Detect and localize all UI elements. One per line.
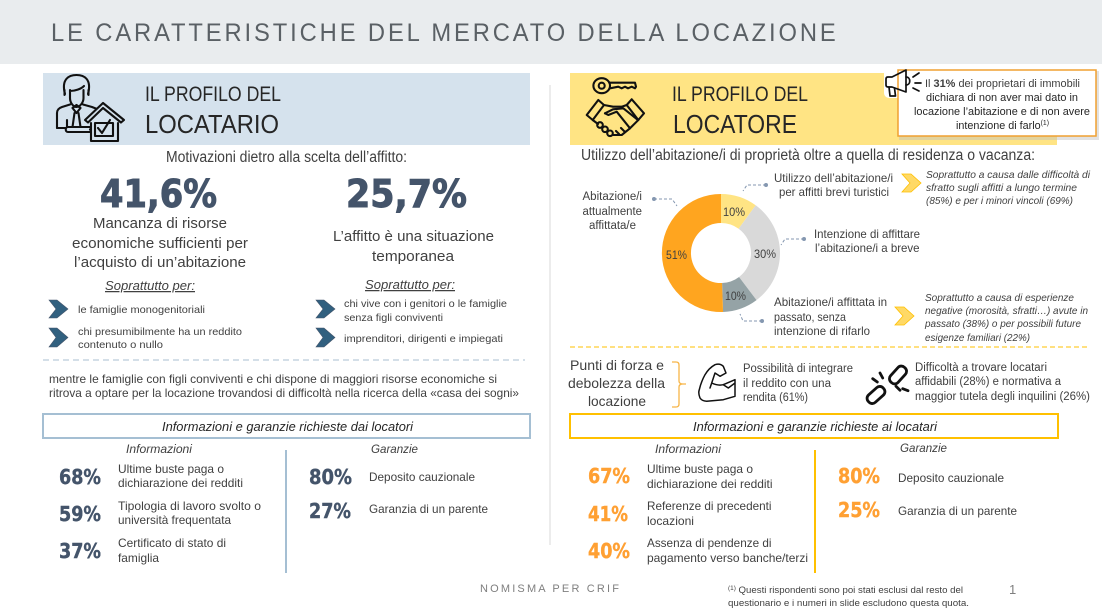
- heading: punti di forza e debolezza: Punti di forza e: [570, 357, 664, 373]
- note: difficoltà di sfratto: sfratto sugli affitti a lungo termine: [926, 182, 1077, 194]
- list: informazioni richieste dai locatori: Ultime buste paga o: [118, 462, 224, 476]
- note: esperienze negative: [895, 292, 1088, 344]
- list: garanzie richieste dai locatori: [309, 442, 488, 523]
- heading: il profilo del locatario: IL PROFILO DEL: [145, 83, 281, 106]
- list: informazioni richieste ai locatari: 67%: [588, 464, 630, 488]
- list: informazioni richieste dai locatori: Informazioni: [126, 442, 192, 456]
- heading: punti di forza e debolezza: [568, 357, 686, 409]
- list: soprattutto per, colonna destra: [316, 278, 507, 347]
- list: soprattutto per, colonna sinistra: [49, 279, 242, 351]
- stat: 25,7%: [333, 172, 494, 265]
- footnote: (1): [728, 586, 736, 592]
- list: informazioni richieste ai locatari: [588, 442, 808, 565]
- text: punto di debolezza: [915, 362, 1090, 403]
- note: difficoltà di sfratto: [902, 169, 1091, 207]
- heading: il profilo del locatario: [145, 83, 281, 139]
- list: soprattutto per, colonna sinistra: Soprattutto per:: [105, 279, 195, 293]
- list: informazioni richieste dai locatori: 59%: [59, 502, 101, 526]
- donut chart: 10%: [725, 289, 746, 303]
- list: garanzie richieste ai locatari: 80%: [838, 464, 880, 488]
- list: informazioni richieste ai locatari: dichiarazione dei redditi: [647, 477, 772, 491]
- heading: il profilo del locatore: LOCATORE: [673, 109, 797, 139]
- note: esperienze negative: passato (38%) o per possibili future: [924, 318, 1081, 330]
- list: garanzie richieste ai locatari: Deposito cauzionale: [898, 471, 1004, 485]
- list: informazioni richieste ai locatari: pagamento verso banche/terzi: [647, 551, 808, 565]
- box: informazioni e garanzie ai locatari: Informazioni e garanzie richieste ai locatari: [693, 419, 938, 434]
- title band: [0, 0, 1102, 64]
- list: soprattutto per, colonna destra: senza figli conviventi: [344, 312, 443, 324]
- label: affitti brevi turistici: [743, 171, 893, 199]
- list: soprattutto per, colonna sinistra: chi presumibilmente ha un reddito: [78, 326, 242, 338]
- list: soprattutto per, colonna destra: imprenditori, dirigenti e impiegati: [344, 333, 503, 345]
- icon: flexed arm: [699, 364, 735, 401]
- icon: tenant with house: [57, 75, 124, 141]
- list: soprattutto per, colonna destra: Soprattutto per:: [365, 278, 455, 292]
- text: punto di debolezza: Difficoltà a trovare locatari: [915, 362, 1047, 374]
- stat: 25,7%: 25,7%: [346, 172, 467, 216]
- list: garanzie richieste ai locatari: [838, 441, 1017, 522]
- list: garanzie richieste dai locatori: Garanzia di un parente: [369, 502, 488, 516]
- list: informazioni richieste dai locatori: Certificato di stato di: [118, 536, 226, 550]
- callout: 31% proprietari: intenzione di farlo: [956, 120, 1042, 132]
- donut chart: 10%: [723, 205, 745, 219]
- note: difficoltà di sfratto: (85%) e per i minori vincoli (69%): [926, 195, 1073, 207]
- list: soprattutto per, colonna sinistra: le famiglie monogenitoriali: [78, 304, 205, 316]
- footer: source: NOMISMA PER CRIF: [480, 583, 619, 595]
- title band: LE CARATTERISTICHE DEL MERCATO DELLA LOCAZIONE: [51, 19, 836, 47]
- list: garanzie richieste dai locatori: 27%: [309, 499, 351, 523]
- subheading: utilizzo dell'abitazione: Utilizzo dell’abitazione/i di proprietà oltre a quella di residenza o vacanza:: [581, 147, 1035, 164]
- list: informazioni richieste ai locatari: 41%: [588, 502, 628, 526]
- text block: famiglie con figli: [49, 372, 519, 400]
- list: informazioni richieste ai locatari: 40%: [588, 539, 630, 563]
- list: informazioni richieste dai locatori: dichiarazione dei redditi: [118, 476, 243, 490]
- note: esperienze negative: Soprattutto a causa di esperienze: [925, 292, 1074, 304]
- icon: megaphone: [886, 70, 921, 96]
- list: informazioni richieste dai locatori: [59, 442, 261, 565]
- heading: il profilo del locatore: [672, 83, 808, 139]
- label: attualmente affittata: Abitazione/i: [582, 191, 642, 203]
- box: informazioni e garanzie dai locatori: [43, 414, 530, 438]
- list: soprattutto per, colonna sinistra: contenuto o nullo: [78, 339, 163, 351]
- text: punto di debolezza: affidabili (28%) e normativa a: [915, 376, 1062, 388]
- footnote: [728, 585, 969, 608]
- label: intenzione di affittare a breve: Intenzione di affittare: [814, 227, 920, 241]
- panel: profilo del locatore: [568, 66, 1099, 573]
- list: garanzie richieste dai locatori: Garanzie: [371, 442, 418, 456]
- list: informazioni richieste dai locatori: 37%: [59, 539, 101, 563]
- box: informazioni e garanzie ai locatari: [570, 414, 1058, 438]
- list: garanzie richieste ai locatari: Garanzia di un parente: [898, 504, 1017, 518]
- text: punto di forza: Possibilità di integrare: [743, 363, 853, 375]
- stat: 25,7%: L’affitto è una situazione: [333, 228, 494, 245]
- text: punto di debolezza: maggior tutela degli inquilini (26%): [915, 391, 1090, 403]
- list: garanzie richieste ai locatari: 25%: [838, 498, 880, 522]
- text: punto di forza: [743, 363, 853, 404]
- label: affitti brevi turistici: per affitti brevi turistici: [779, 185, 889, 199]
- label: attualmente affittata: [582, 191, 677, 232]
- label: attualmente affittata: attualmente: [582, 206, 642, 218]
- stat: 41,6%: 41,6%: [100, 172, 217, 216]
- label: intenzione di affittare a breve: l’abitazione/i a breve: [815, 241, 920, 255]
- note: esperienze negative: esigenze familiari (22%): [925, 332, 1030, 344]
- list: soprattutto per, colonna destra: chi vive con i genitori o le famiglie: [344, 298, 507, 310]
- callout: 31% proprietari: dichiara di non aver mai dato in: [926, 92, 1078, 104]
- label: intenzione di affittare a breve: [781, 227, 920, 255]
- list: informazioni richieste ai locatari: locazioni: [647, 514, 694, 528]
- heading: punti di forza e debolezza: debolezza della: [568, 375, 665, 391]
- panel: profilo del locatario: [43, 73, 530, 573]
- label: attualmente affittata: affittata/e: [589, 220, 636, 232]
- list: informazioni richieste ai locatari: Informazioni: [655, 442, 721, 456]
- note: difficoltà di sfratto: Soprattutto a causa dalle difficoltà di: [926, 169, 1091, 181]
- stat: 41,6%: [72, 172, 248, 271]
- note: esperienze negative: negative (morosità, sfratti…) avute in: [925, 305, 1088, 317]
- label: affittata in passato: intenzione di rifarlo: [774, 324, 870, 338]
- list: garanzie richieste dai locatori: 80%: [309, 465, 352, 489]
- callout: 31% proprietari: Il 31% dei proprietari di immobili: [925, 78, 1080, 90]
- list: informazioni richieste ai locatari: Ultime buste paga o: [647, 462, 753, 476]
- label: affittata in passato: [740, 295, 887, 338]
- stat: 25,7%: temporanea: [372, 248, 455, 265]
- label: affittata in passato: Abitazione/i affittata in: [774, 295, 887, 309]
- text block: famiglie con figli: mentre le famiglie con figli conviventi e chi dispone di maggiori risorse economiche si: [49, 372, 497, 386]
- heading: il profilo del locatario: LOCATARIO: [145, 109, 279, 139]
- heading: il profilo del locatore: IL PROFILO DEL: [672, 83, 808, 106]
- text: punto di forza: il reddito con una: [743, 378, 832, 390]
- list: garanzie richieste ai locatari: Garanzie: [900, 441, 947, 455]
- label: affittata in passato: passato, senza: [774, 310, 846, 324]
- donut chart: [662, 194, 780, 312]
- callout: 31% proprietari: [884, 66, 1099, 140]
- text: punto di forza: rendita (61%): [743, 392, 808, 404]
- list: informazioni richieste dai locatori: famiglia: [118, 551, 159, 565]
- label: affitti brevi turistici: Utilizzo dell’abitazione/i: [774, 171, 893, 185]
- box: informazioni e garanzie dai locatori: Informazioni e garanzie richieste dai locatori: [162, 419, 414, 434]
- stat: 41,6%: economiche sufficienti per: [72, 235, 248, 252]
- donut chart: 51%: [666, 248, 687, 262]
- page number: 1: [1009, 582, 1016, 597]
- heading: punti di forza e debolezza: locazione: [588, 393, 646, 409]
- stat: 41,6%: Mancanza di risorse: [93, 215, 227, 232]
- callout: 31% proprietari: (1): [1041, 120, 1049, 127]
- list: garanzie richieste dai locatori: Deposito cauzionale: [369, 470, 475, 484]
- list: informazioni richieste dai locatori: Tipologia di lavoro svolto o: [118, 499, 261, 513]
- list: informazioni richieste dai locatori: università frequentata: [118, 513, 231, 527]
- stat: 41,6%: l’acquisto di un’abitazione: [74, 254, 246, 271]
- text block: famiglie con figli: ritrova a optare per la locazione trovandosi di difficoltà nella ricerca della «casa dei sogni»: [49, 386, 519, 400]
- list: informazioni richieste dai locatori: 68%: [59, 465, 101, 489]
- list: informazioni richieste ai locatari: Assenza di pendenze di: [647, 536, 772, 550]
- icon: broken chain: [865, 364, 908, 405]
- list: informazioni richieste ai locatari: Referenze di precedenti: [647, 499, 772, 513]
- footnote: questionario e i numeri in slide escludono questa quota.: [728, 598, 969, 608]
- icon: key and handshake: [587, 78, 644, 136]
- footnote: Questi rispondenti sono poi stati esclusi dal resto del: [736, 585, 963, 595]
- donut chart: 30%: [754, 247, 776, 261]
- subheading: motivazioni: Motivazioni dietro alla scelta dell’affitto:: [166, 149, 407, 166]
- callout: 31% proprietari: locazione l’abitazione e di non avere: [914, 106, 1090, 118]
